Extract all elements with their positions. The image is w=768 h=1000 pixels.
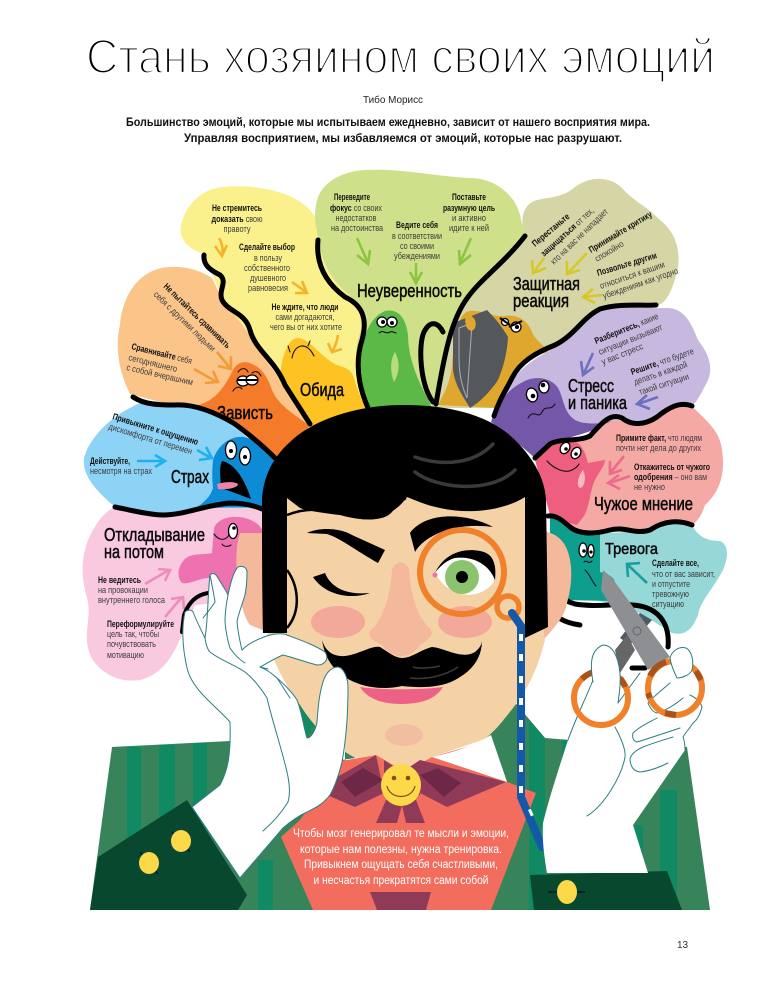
text: salmon tips: Примите факт, что людям [616, 433, 702, 443]
text: yellow tips: доказать свою [212, 214, 263, 224]
dividers: black curved lines [115, 236, 692, 668]
face: stress i panika [525, 381, 555, 418]
text: peach tips: Сравнивайте себя [131, 341, 193, 366]
text: green tips: со своими [400, 241, 434, 251]
arrows: green [357, 238, 471, 283]
text: yellow tips: Сделайте выбор [239, 242, 295, 252]
text: blue tips: несмотря на страх [90, 466, 152, 476]
text: purple tips: делать в каждой [632, 359, 689, 387]
text: purple tips: ситуации вызывают [597, 322, 664, 357]
nose [369, 562, 432, 656]
face: strakh [217, 441, 251, 499]
monster: neuverennost [358, 310, 432, 410]
right cuff button [548, 880, 585, 904]
text: teal tips [652, 558, 715, 609]
monster: chuzhoe mnenie [535, 440, 605, 525]
text: khaki tips: Перестаньте [530, 211, 572, 249]
panel: zashchitnaya reaktsiya (defensive reaction) [436, 179, 679, 408]
text: salmon tips: не нужно [634, 482, 665, 492]
heading: chuzhoe mnenie: Чужое мнение [594, 494, 693, 514]
text: pink tips [98, 575, 174, 660]
heading: obida: Обида [300, 380, 345, 400]
text: blue tips: Действуйте, [90, 456, 130, 466]
title: Стань хозяином своих эмоций [86, 31, 715, 84]
callout text: и несчастья прекратятся сами собой [314, 875, 488, 887]
text: peach tips: с собой вчерашним [126, 362, 194, 387]
suit stripes [127, 692, 677, 910]
heading: neuverennost: Неуверенность [357, 281, 462, 301]
panel: zavist (envy) [118, 267, 312, 460]
monocle eye [432, 550, 495, 595]
text: pink tips: Не ведитесь [98, 575, 141, 585]
text: blue tips [90, 411, 200, 476]
right glove fingers [591, 645, 693, 703]
collar right tip [432, 735, 507, 782]
purple blob [497, 307, 710, 428]
face: zavist [233, 369, 261, 391]
monster: otkladyvanie [179, 517, 264, 600]
text: green tips: Ведите себя [396, 220, 438, 230]
shirt [281, 740, 536, 910]
teal blob [595, 522, 727, 634]
cheeks [311, 606, 492, 638]
heading: stress i panika: и паника [568, 393, 628, 413]
text: green tips [330, 192, 495, 261]
text: purple tips [593, 311, 695, 397]
khaki blob [436, 179, 679, 408]
text: yellow tips: Не ждите, что люди [272, 302, 338, 312]
face: obida [288, 341, 314, 358]
text: teal tips: тревожную [652, 589, 689, 599]
text: green tips: Поставьте [452, 192, 486, 202]
face: chuzhoe mnenie [547, 441, 583, 471]
text: green tips: идите к ней [449, 223, 489, 233]
panel: chuzhoe mnenie (others' opinion) [535, 406, 723, 532]
panel: obida (resentment) [181, 186, 367, 426]
text: yellow tips: сами догадаются, [276, 312, 334, 322]
text: green tips: недостатков [336, 213, 377, 223]
text: purple tips: такой ситуации [638, 371, 690, 397]
text: teal tips: Сделайте все, [652, 558, 699, 568]
text: khaki tips: Позвольте другим [596, 250, 658, 278]
page number: 13 [677, 940, 689, 951]
text: khaki tips [530, 206, 679, 301]
left glove [183, 566, 348, 878]
bow tie [327, 755, 506, 823]
salmon blob [535, 406, 723, 532]
text: green tips: на достоинства [331, 223, 383, 233]
text: yellow tips: чего вы от них хотите [270, 322, 342, 332]
character: face [267, 490, 545, 771]
text: yellow tips: в пользу [254, 253, 282, 263]
character: ears and neck [236, 520, 571, 653]
text: teal tips: что от вас зависит, [652, 569, 715, 579]
monster: zavist [195, 362, 310, 460]
heading: zashchitnaya reaktsiya: реакция [513, 291, 569, 311]
right glove [543, 660, 702, 873]
text: green tips: в соответствии [392, 231, 442, 241]
face: zashchitnaya reaktsiya [500, 318, 522, 332]
monster: obida [280, 338, 367, 426]
callout text [293, 828, 509, 887]
text: blue tips: Привыкните к ощущению [111, 411, 200, 447]
arrows: blue [137, 447, 212, 467]
arrows: salmon [608, 456, 630, 489]
eyebrows and winking eye [307, 516, 493, 596]
text: peach tips: Не пытайтесь сравнивать [162, 281, 233, 351]
text: yellow tips: душевного [250, 273, 286, 283]
character: suit [90, 692, 710, 910]
blue blob [84, 401, 275, 515]
monster: zashchitnaya reaktsiya [438, 311, 548, 408]
arrows: yellow [215, 238, 342, 352]
heading: strakh: Страх [171, 467, 209, 487]
subtitle: Управляя восприятием, мы избавляемся от эмоций, которые нас разрушают. [184, 131, 622, 145]
author: Тибо Морисс [363, 94, 423, 106]
text: yellow tips: равновесия [248, 283, 288, 293]
face: neuverennost [377, 317, 397, 333]
smiley brooch [381, 764, 421, 806]
callout text: которые нам полезны, нужна тренировка. [300, 844, 502, 856]
text: pink tips: на провокации [98, 585, 148, 595]
monster: stress i panika [491, 378, 612, 458]
text: pink tips: цель так, чтобы [107, 629, 159, 639]
right cuff [530, 871, 682, 910]
shirt bottom bow [370, 892, 431, 910]
text: purple tips: Решите, что будете [629, 346, 695, 377]
text: salmon tips: почти нет дела до других [616, 443, 701, 453]
text: teal tips: и отпустите [652, 579, 690, 589]
text: yellow tips: собственного [244, 263, 290, 273]
pink blob [83, 507, 264, 681]
text: green tips: убеждениями [394, 251, 440, 261]
text: purple tips: Разберитесь, какие [593, 311, 660, 346]
yellow blob [181, 186, 367, 426]
side curl [287, 570, 297, 628]
panel: neuverennost (self-doubt) [315, 170, 525, 410]
text: salmon tips: одобрения – оно вам [634, 472, 707, 482]
arrows: khaki [532, 253, 602, 303]
panel: otkladyvanie (procrastination) [83, 507, 264, 681]
panel: strakh (fear) [84, 401, 275, 516]
face: otkladyvanie [214, 524, 238, 546]
text: peach tips: себя с другими людьми [152, 289, 218, 353]
text: yellow tips [212, 203, 342, 332]
text: pink tips: Переформулируйте [107, 619, 174, 629]
text: teal tips: ситуацию [652, 599, 684, 609]
heading: trevoga: Тревога [605, 541, 658, 558]
subtitle: Большинство эмоций, которые мы испытываем ежедневно, зависит от нашего восприятия мира. [126, 115, 650, 129]
text: khaki tips: убеждениям как угодно [601, 266, 679, 301]
monster mark [391, 352, 399, 382]
callout text: Чтобы мозг генерировал те мысли и эмоции, [293, 828, 509, 840]
arrows: peach [194, 352, 231, 383]
text: green tips: Переведите [334, 192, 370, 202]
left cuff [90, 800, 247, 910]
text: khaki tips: спокойно [593, 239, 625, 264]
heading: stress i panika [568, 376, 628, 413]
callout text: Привыкнем ощущать себя счастливыми, [304, 859, 498, 871]
text: blue tips: дискомфорта от перемен [107, 421, 194, 456]
monster: strakh [180, 437, 274, 516]
shield [453, 310, 508, 408]
panel: trevoga (anxiety) [550, 515, 727, 634]
hair highlights [415, 444, 515, 486]
text: khaki tips: защищаться от тех, [539, 206, 596, 258]
text: peach tips: сегодняшнего [128, 352, 178, 374]
text: salmon tips [616, 433, 710, 492]
arrows: purple [581, 353, 658, 409]
text: khaki tips: Принимайте критику [587, 209, 654, 255]
text: pink tips: внутреннего голоса [98, 595, 165, 605]
arrows: pink [145, 569, 184, 617]
text: khaki tips: кто на вас не нападает [548, 206, 610, 266]
panel: stress i panika (stress and panic) [491, 307, 710, 458]
arrow: teal [627, 563, 647, 583]
drop mark [578, 470, 585, 488]
monocle [420, 530, 519, 618]
monster: trevoga [550, 515, 615, 601]
text: yellow tips: правоту [224, 224, 251, 234]
peach blob [118, 267, 312, 444]
text: salmon tips: Откажитесь от чужого [634, 462, 710, 472]
heading: zashchitnaya reaktsiya: Защитная [513, 274, 580, 294]
moustache [322, 640, 482, 688]
character: hair [262, 405, 548, 638]
heading: otkladyvanie [104, 525, 205, 562]
text: pink tips: почувствовать [107, 639, 156, 649]
text: yellow tips: Не стремитесь [212, 203, 262, 213]
text: green tips: фокус со своих [330, 203, 382, 213]
subtitle [126, 115, 650, 145]
text: pink tips: мотивацию [107, 650, 144, 660]
heading: stress i panika: Стресс [568, 376, 614, 396]
scissors [574, 570, 702, 725]
monocle chain [512, 613, 542, 847]
mouth [360, 687, 443, 704]
text: purple tips: у вас стресс [600, 341, 645, 367]
scissor rings [574, 661, 702, 725]
text: peach tips [126, 281, 233, 387]
text: green tips: разумную цель [443, 203, 495, 213]
green blob [315, 170, 525, 410]
text: green tips: и активно [452, 213, 486, 223]
heading: otkladyvanie: на потом [104, 542, 164, 562]
face: trevoga [579, 543, 596, 586]
heading: zashchitnaya reaktsiya [513, 274, 580, 311]
chin [385, 724, 423, 746]
heading: otkladyvanie: Откладывание [104, 525, 205, 545]
collar [341, 737, 507, 782]
left cuff buttons [139, 830, 191, 874]
heading: zavist: Зависть [217, 403, 273, 423]
text: khaki tips: относиться к вашим [598, 259, 666, 291]
